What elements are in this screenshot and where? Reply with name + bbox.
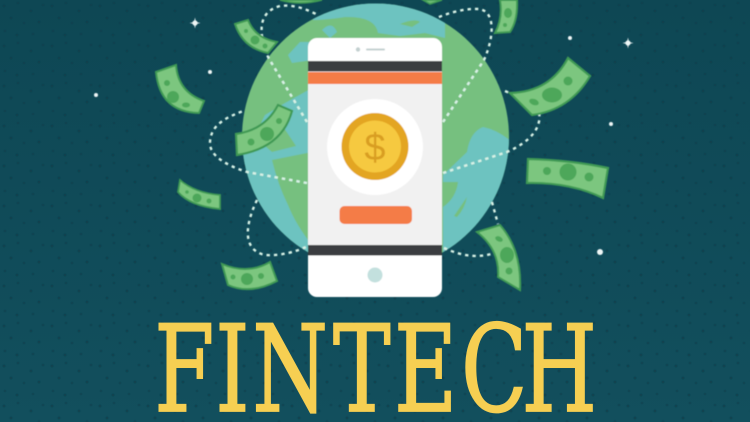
coin halo (327, 99, 423, 195)
globe (240, 0, 512, 275)
smartphone (308, 38, 442, 297)
phone screen (308, 84, 442, 245)
bill: right middle (527, 159, 608, 198)
phone camera and speaker (356, 47, 385, 52)
stars (94, 18, 634, 255)
bill: right large (510, 58, 590, 115)
globe: land (272, 152, 308, 240)
bill: top edge right (423, 0, 442, 4)
bill: lower right (477, 225, 520, 290)
phone top dark bar (308, 61, 442, 72)
orange button (340, 206, 412, 224)
illustration (94, 0, 634, 297)
phone orange bar (308, 72, 442, 84)
phone home button (368, 268, 382, 282)
globe: oceans (313, 0, 445, 38)
bill: bottom left (222, 262, 277, 289)
bill: middle left over globe (236, 105, 292, 155)
bill: upper left small (235, 20, 277, 53)
coin (342, 113, 408, 180)
bill: lower left (178, 180, 220, 209)
bill: top edge centre (280, 0, 322, 3)
phone bottom dark bar (308, 245, 442, 256)
coin: $ (364, 127, 386, 169)
bill: top right (495, 0, 517, 33)
money bills (156, 0, 608, 290)
bill: upper left large (156, 65, 204, 113)
orbit lines (210, 6, 539, 256)
